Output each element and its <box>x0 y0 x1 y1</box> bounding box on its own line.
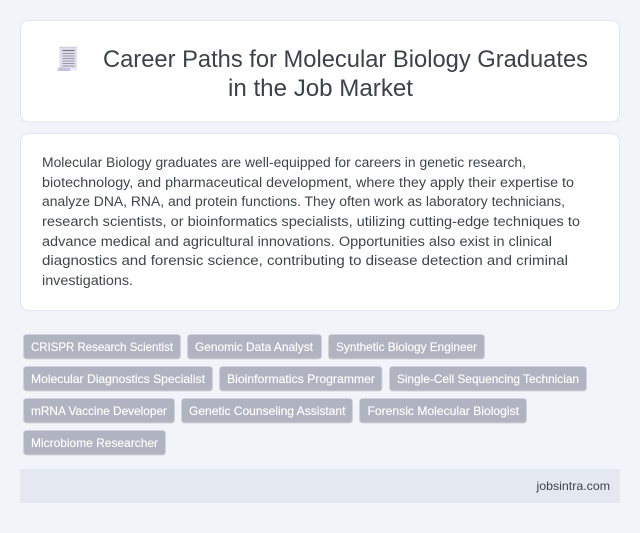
title: Career Paths for Molecular Biology Graduates <box>103 46 588 73</box>
tag: mRNA Vaccine Developer <box>24 398 174 423</box>
description text: advance medical and agricultural innovations. Opportunities also exist in clinical <box>42 234 552 250</box>
description text <box>42 155 580 289</box>
description text: Molecular Biology graduates are well-equipped for careers in genetic research, <box>42 155 526 171</box>
description text: diagnostics and forensic science, contributing to disease detection and criminal <box>42 253 568 269</box>
tag: Forensic Molecular Biologist: Forensic Molecular Biologist <box>368 404 520 418</box>
tag: CRISPR Research Scientist <box>24 334 180 359</box>
tag: mRNA Vaccine Developer: mRNA Vaccine Developer <box>31 404 167 418</box>
tag: Genetic Counseling Assistant <box>182 398 352 423</box>
title: in the Job Market <box>228 75 413 102</box>
tag: Molecular Diagnostics Specialist: Molecular Diagnostics Specialist <box>31 372 206 386</box>
tag: Genomic Data Analyst: Genomic Data Analyst <box>195 340 314 354</box>
tag: CRISPR Research Scientist: CRISPR Research Scientist <box>31 340 174 354</box>
description text: analyze DNA, RNA, and protein functions. They often work as laboratory technicians, <box>42 194 565 210</box>
tag: Bioinformatics Programmer <box>220 366 382 391</box>
tag: Bioinformatics Programmer: Bioinformatics Programmer <box>227 372 375 386</box>
tag: Microbiome Researcher <box>24 430 166 455</box>
tag: Microbiome Researcher: Microbiome Researcher <box>31 436 158 450</box>
panel: description <box>20 134 620 310</box>
tag: Single-Cell Sequencing Technician <box>390 366 586 391</box>
description text: research scientists, or bioinformatics specialists, utilizing cutting-edge techniques to <box>42 214 580 230</box>
tag: Single-Cell Sequencing Technician: Single-Cell Sequencing Technician <box>397 372 579 386</box>
tag: Synthetic Biology Engineer <box>328 334 484 359</box>
title <box>103 46 588 102</box>
footer: jobsintra.com <box>535 479 610 493</box>
tag: Genetic Counseling Assistant: Genetic Counseling Assistant <box>189 404 346 418</box>
tag: Forensic Molecular Biologist <box>360 398 526 423</box>
tag: Molecular Diagnostics Specialist <box>24 366 212 391</box>
icon: paper scroll <box>57 47 77 71</box>
tag: Synthetic Biology Engineer: Synthetic Biology Engineer <box>336 340 477 354</box>
panel: title card <box>20 20 620 122</box>
footer <box>20 469 620 503</box>
description text: biotechnology, and pharmaceutical development, where they apply their expertise to <box>42 175 574 191</box>
description text: investigations. <box>42 273 133 289</box>
tag: Genomic Data Analyst <box>188 334 322 359</box>
